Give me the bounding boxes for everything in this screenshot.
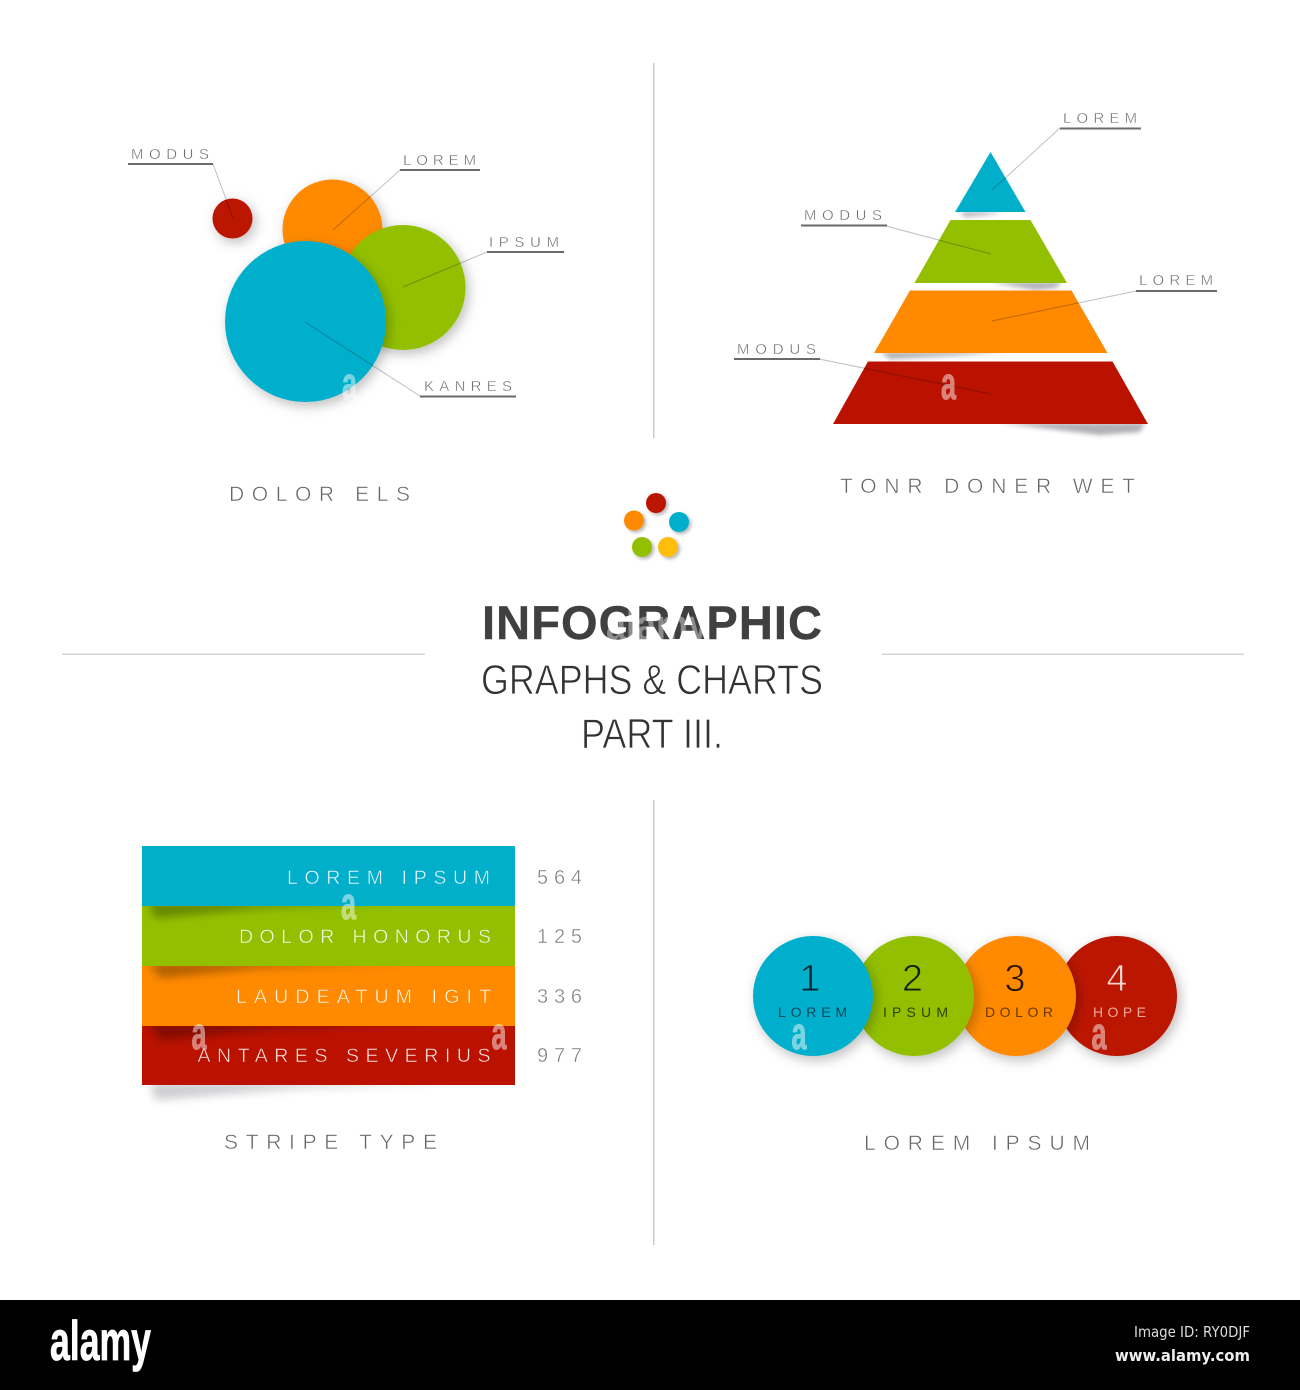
- panel: stripe chart: [142, 846, 582, 1100]
- stripe labels: ANTARES SEVERIUS: [198, 1045, 490, 1067]
- stripe values: 125: [537, 926, 582, 948]
- circle: kanres: [225, 241, 386, 402]
- label: ipsum: IPSUM: [489, 234, 559, 251]
- footer url: www.alamy.com: [1115, 1346, 1250, 1365]
- circle: lorem: [282, 180, 382, 280]
- circle 1: lorem: [753, 936, 873, 1056]
- circle labels: LOREM: [778, 1004, 847, 1020]
- stripe values: 564: [537, 867, 582, 889]
- circle labels: HOPE: [1093, 1004, 1146, 1020]
- stripe inner shadows: [146, 906, 392, 1044]
- stripe labels: [198, 867, 491, 1067]
- watermark: a: [342, 358, 358, 409]
- panel: pyramid chart: [734, 110, 1217, 435]
- circle 4: hope: [1057, 936, 1177, 1056]
- watermarks: a: [792, 1008, 807, 1059]
- stripe: lorem ipsum: [142, 846, 515, 906]
- shadow below stripes: [150, 1082, 450, 1100]
- stripe labels: LAUDEATUM IGIT: [236, 986, 491, 1008]
- footer image id: Image ID: RY0DJF: [1134, 1323, 1250, 1341]
- footer bar: [0, 1300, 1300, 1390]
- label: lorem: LOREM: [403, 152, 476, 169]
- stripe values: [537, 867, 582, 1067]
- icon: five dot logo: [624, 493, 689, 557]
- caption: dolor els: DOLOR ELS: [229, 483, 410, 506]
- heading: infographic: INFOGRAPHIC: [482, 596, 822, 649]
- pyramid shadows: [880, 212, 1145, 435]
- stripe values: 336: [537, 986, 582, 1008]
- circle labels: [778, 1004, 1146, 1020]
- pyramid tier: base: [833, 362, 1148, 424]
- label: top lorem: LOREM: [1063, 110, 1137, 127]
- circle 2: ipsum: [854, 936, 974, 1056]
- circle numbers: [799, 958, 1128, 1000]
- pyramid tier: third: [874, 290, 1108, 353]
- pyramid tier: second: [914, 220, 1067, 283]
- circle: ipsum: [340, 225, 466, 350]
- circle numbers: 4: [1106, 958, 1128, 1000]
- caption: lorem ipsum: LOREM IPSUM: [864, 1132, 1090, 1155]
- watermark over heading: alamy: [606, 601, 708, 650]
- stripe: antares severius: [142, 1026, 515, 1085]
- label: lower modus: MODUS: [737, 341, 816, 358]
- footer logo: alamy: [50, 1309, 151, 1372]
- panel: circle chart: [128, 146, 564, 409]
- circle numbers: 2: [902, 958, 923, 1000]
- circle 3: dolor: [956, 936, 1076, 1056]
- panel: numbered circles: [753, 936, 1177, 1059]
- title: [481, 596, 823, 757]
- circle: modus: [212, 198, 252, 238]
- watermark: a: [941, 358, 957, 409]
- stripe labels: LOREM IPSUM: [287, 867, 490, 889]
- watermarks: a: [341, 878, 357, 929]
- heading: part III: PART III.: [581, 710, 723, 757]
- stripe values: 977: [537, 1045, 582, 1067]
- watermarks: a: [192, 1008, 207, 1059]
- pyramid tier: top: [955, 152, 1026, 212]
- stripe labels: DOLOR HONORUS: [239, 926, 491, 948]
- circle numbers: 3: [1004, 958, 1026, 1000]
- label: kanres: KANRES: [424, 378, 512, 395]
- stripe: dolor honorus: [142, 906, 515, 966]
- circle labels: IPSUM: [883, 1004, 948, 1020]
- label: right lorem: LOREM: [1139, 272, 1213, 289]
- watermarks: [792, 1008, 1107, 1059]
- heading: graphs and charts: GRAPHS & CHARTS: [481, 656, 823, 703]
- caption: stripe type: STRIPE TYPE: [224, 1131, 437, 1154]
- label: modus: MODUS: [131, 146, 209, 163]
- stripe: laudeatum igit: [142, 966, 515, 1026]
- leader lines: [213, 164, 487, 396]
- watermarks: a: [492, 1008, 507, 1059]
- circle labels: DOLOR: [985, 1004, 1053, 1020]
- leader lines: [819, 128, 1136, 394]
- circle numbers: 1: [799, 958, 821, 1000]
- watermarks: [192, 878, 507, 1059]
- caption: tonr doner wet: TONR DONER WET: [840, 475, 1135, 498]
- watermarks: a: [1092, 1008, 1107, 1059]
- label: left modus: MODUS: [804, 207, 882, 224]
